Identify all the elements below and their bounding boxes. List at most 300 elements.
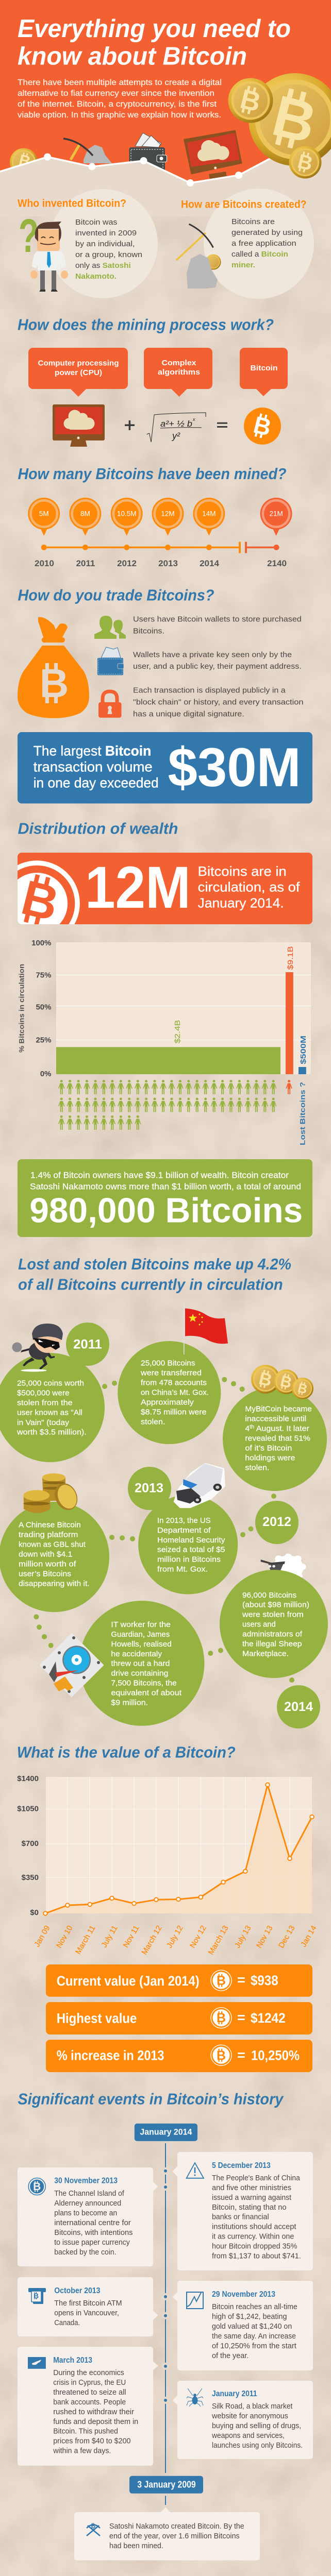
bubble: Mt. Gox 25,000: stolen.	[141, 1418, 165, 1427]
bubble: All in Vain 2011: 25,000 coins worth	[17, 1379, 84, 1387]
callout: 30M transaction: in one day exceeded	[34, 775, 159, 791]
card: 5 December 2013: it as currency. Within one	[212, 2232, 294, 2241]
card: Satoshi creates Bitcoin: Satoshi Nakamoto created Bitcoin. By the	[109, 2522, 244, 2531]
text: who invented: or a group, known	[75, 250, 142, 259]
icon: users	[94, 616, 126, 639]
bubble: 2013 Homeland Security	[128, 1467, 238, 1594]
callout: 12M in circulation: Bitcoins are in	[198, 863, 287, 879]
bubble: MyBitCoin: inaccessible until	[245, 1415, 306, 1423]
pin: 2013	[152, 498, 184, 536]
label: 3 January 2009: 3 January 2009	[137, 2480, 196, 2490]
callout: 980,000 Bitcoins: Satoshi Nakamoto owns more than $1 billion worth, a total of around	[30, 1182, 301, 1192]
panel: distribution of wealth	[0, 819, 312, 1237]
heading: significant events: Significant events in Bitcoin’s history	[18, 2090, 284, 2108]
bubble: GBL: A Chinese Bitcoin	[19, 1521, 81, 1530]
card: 29 November 2013: the same day. An increase	[212, 2332, 296, 2341]
card: 29 November 2013: of the year.	[212, 2351, 249, 2360]
stat: percent increase: =	[237, 2047, 245, 2063]
text: block chain	[133, 686, 303, 718]
intro text	[18, 78, 222, 120]
panel: mining process	[18, 315, 288, 447]
icon: armoured truck	[174, 1463, 225, 1508]
callout: 980,000 Bitcoins: 980,000 Bitcoins	[29, 1191, 303, 1230]
card: 29 November 2013: of 10,250% from the start	[212, 2342, 297, 2350]
heading: lost and stolen: of all Bitcoins currently in circulation	[18, 1275, 283, 1293]
bubble: GBL: disappearing with it.	[19, 1579, 90, 1588]
stat: current value	[46, 1964, 312, 1997]
card: March 2013	[18, 2347, 158, 2466]
icon: three coins: B	[257, 1368, 274, 1391]
bar chart: wealth distribution: % Bitcoins in circulation	[18, 964, 25, 1053]
bubble: Sheep Marketplace: administrators of	[242, 1630, 303, 1638]
icon: coin stacks	[23, 1473, 81, 1513]
pin: 2140: 21M	[269, 510, 283, 517]
card: March 2013: threatened to seize all	[53, 2388, 126, 2397]
icon: orange Bitcoin	[244, 408, 281, 445]
line chart: Bitcoin price: Dec 13	[277, 1924, 296, 1950]
bubble: James Howells: Guardian, James	[111, 1630, 170, 1639]
heading: distribution: Distribution of wealth	[18, 819, 178, 837]
bubble: James Howells	[79, 1601, 204, 1726]
stat: percent increase: 10,250%	[251, 2048, 300, 2063]
line chart: Bitcoin price: July 12	[165, 1924, 185, 1950]
panel: who invented Bitcoin	[18, 189, 158, 298]
heading: lost and stolen: Lost and stolen Bitcoins make up 4.2%	[18, 1255, 291, 1273]
label: lost Bitcoins: Lost Bitcoins ?	[299, 1082, 307, 1145]
hill	[0, 126, 331, 216]
card: March 2013: prices from $40 to $200	[53, 2437, 131, 2446]
bubble: 2012: 2012	[262, 1515, 291, 1529]
line graph ridge	[0, 126, 331, 187]
card: 5 December 2013: Bitcoin, stating that no	[212, 2203, 287, 2212]
callout: 980,000 Bitcoins	[18, 1159, 312, 1237]
text: who invented: only as Satoshi	[75, 261, 131, 270]
text: how created: called a Bitcoin	[231, 250, 288, 259]
bubble: 2014: 2014	[284, 1700, 313, 1714]
bubble: Sheep Marketplace: were stolen from	[242, 1611, 304, 1619]
pin: 2014: 14M	[202, 510, 216, 517]
heading: how created: How are Bitcoins created?	[181, 198, 307, 210]
card: 30 November 2013: The Channel Island of	[54, 2189, 124, 2198]
text: keys	[133, 650, 302, 671]
card: Satoshi creates Bitcoin: B	[91, 2522, 96, 2530]
bubble: Mt. Gox 25,000: from 478 accounts	[141, 1379, 207, 1387]
line chart: Bitcoin price: July 13	[233, 1924, 253, 1950]
card: January 2011: launches using only Bitcoins.	[212, 2441, 303, 2450]
card: 5 December 2013: 5 December 2013	[212, 2161, 271, 2170]
card: 5 December 2013	[173, 2152, 313, 2270]
card: January 2011: buying and selling of drugs,	[212, 2421, 301, 2430]
line chart: Bitcoin price	[17, 1774, 318, 1956]
card: March 2013: March 2013	[53, 2356, 92, 2365]
bubble: Mt. Gox 25,000: were transferred	[140, 1369, 202, 1378]
heading: lost and stolen	[18, 1255, 291, 1293]
people icons: Bitcoin owners	[58, 1080, 276, 1130]
callout: algorithms	[144, 348, 212, 397]
bubble: MyBitCoin: revealed that 51%	[245, 1434, 310, 1443]
bar chart: wealth distribution: $9.1B	[286, 946, 295, 970]
bubble: All in Vain 2011: stolen from the	[17, 1398, 73, 1408]
bubble: GBL: down with $4.1	[19, 1550, 72, 1559]
bubble: MyBitCoin: August. It later	[254, 1424, 309, 1433]
callout: algorithms: algorithms	[158, 368, 200, 377]
card: 30 November 2013: B	[33, 2181, 41, 2193]
bubble: James Howells: 7,500 Bitcoins, the	[111, 1679, 177, 1688]
callout: 12M in circulation: circulation, as of	[198, 879, 300, 895]
callout: Bitcoin: Bitcoin	[251, 364, 277, 372]
year labels: 2012	[117, 558, 137, 568]
callout: 30M transaction	[18, 732, 312, 804]
stat: current value: =	[237, 1972, 245, 1988]
formula	[147, 413, 206, 442]
line chart: Bitcoin price: $700	[22, 1839, 39, 1848]
formula: x	[192, 417, 195, 422]
card: 30 November 2013: to issue paper currency	[54, 2238, 130, 2247]
line chart: Bitcoin price: Nov 10	[55, 1924, 74, 1950]
stat: current value: Current value (Jan 2014)	[57, 1973, 200, 1989]
panel: value of a Bitcoin	[17, 1743, 318, 2072]
icon: money bag	[18, 617, 89, 718]
text: keys: user, and a public key, their payment address.	[133, 662, 302, 671]
icon: thief	[12, 1324, 63, 1371]
card: October 2013: Canada.	[54, 2318, 80, 2327]
icon: coin behind hill: B	[17, 151, 32, 171]
text: who invented: by an individual,	[75, 240, 135, 248]
bubble: All in Vain 2011: worth $3.5 million).	[16, 1428, 87, 1437]
bubble: James Howells: IT worker for the	[111, 1620, 171, 1629]
card: March 2013: within a few days.	[53, 2447, 111, 2455]
card: March 2013: crisis in Cyprus, the EU	[53, 2378, 126, 2387]
card: 30 November 2013: plans to become an	[54, 2209, 117, 2217]
bar chart: wealth distribution: 100%	[31, 939, 52, 947]
text: block chain: "block chain" or history, and every transaction	[133, 698, 303, 706]
bubble: 2013 Homeland Security: In 2013, the US	[157, 1516, 211, 1525]
bubble: GBL: million worth of	[19, 1560, 76, 1568]
icon: large coins: B	[295, 150, 315, 175]
line chart: Bitcoin price: March 13	[206, 1924, 230, 1956]
year labels: 2011	[76, 558, 95, 568]
text: how created: Bitcoins are	[231, 217, 275, 226]
timeline axis	[41, 542, 279, 553]
text: who invented	[75, 218, 142, 281]
icon: large coins: B	[267, 83, 322, 156]
card: October 2013: October 2013	[54, 2286, 101, 2295]
card: 5 December 2013: institutions should accept	[212, 2223, 296, 2231]
bubble: 2012	[255, 1501, 299, 1544]
callout: 980,000 Bitcoins: 1.4% of Bitcoin owners have $9.1 billion of wealth. Bitcoin creator	[30, 1171, 289, 1180]
card: March 2013: bank accounts. People	[53, 2398, 126, 2406]
card: Satoshi creates Bitcoin	[74, 2507, 260, 2561]
line chart: Bitcoin price: Jan 09	[32, 1924, 52, 1948]
card: October 2013: The first Bitcoin ATM	[54, 2299, 122, 2308]
callout: 12M in circulation: 12M	[85, 855, 191, 921]
card: 29 November 2013: high of $1,242, beating	[212, 2312, 287, 2321]
year labels: 2140	[267, 558, 287, 568]
bubble: 2013 Homeland Security: 2013	[135, 1481, 163, 1496]
bubble: Sheep Marketplace: (about $98 million)	[242, 1601, 309, 1609]
pin: 2013: 12M	[161, 510, 175, 517]
bubble: All in Vain 2011: 2011	[73, 1337, 102, 1351]
timeline line	[162, 2143, 169, 2505]
line chart: Bitcoin price: $1400	[17, 1774, 39, 1783]
bubble: James Howells: he accidentaly	[111, 1650, 162, 1658]
bubble: GBL: user’s Bitcoins	[19, 1569, 71, 1578]
title	[18, 15, 291, 71]
card: March 2013: funds and deposit them in	[53, 2417, 138, 2426]
card: January 2011: January 2011	[212, 2389, 257, 2398]
stat: percent increase	[46, 2040, 312, 2072]
formula: y²	[171, 431, 180, 441]
card: 30 November 2013	[18, 2167, 158, 2266]
text: block chain: has a unique digital signature.	[133, 709, 244, 718]
heading: how many mined: How many Bitcoins have been mined?	[18, 465, 287, 483]
bubble: All in Vain 2011: in Vain" (today	[17, 1418, 70, 1427]
card: 5 December 2013: hour Bitcoin dropped 35%	[212, 2242, 297, 2251]
stat: current value: B	[217, 1974, 226, 1988]
callout: 30M transaction: transaction volume	[34, 759, 153, 774]
heading: who invented: Who invented Bitcoin?	[18, 198, 126, 210]
stat: highest value	[46, 2002, 312, 2035]
panel: how are Bitcoins created	[176, 189, 314, 299]
bubble: James Howells: equivalent of about	[111, 1689, 182, 1697]
bubble: 2014	[277, 1685, 320, 1728]
text: wallets: Bitcoins.	[133, 626, 164, 635]
card: 30 November 2013: 30 November 2013	[54, 2177, 118, 2185]
bar chart: wealth distribution: $500M	[299, 1036, 308, 1064]
bar chart: wealth distribution	[18, 939, 311, 1078]
icon: monitor with cloud	[184, 130, 242, 179]
line chart: Bitcoin price: March 11	[74, 1924, 97, 1956]
stat: highest value: B	[217, 2011, 226, 2025]
year labels: 2014	[200, 558, 219, 568]
heading: value: What is the value of a Bitcoin?	[17, 1743, 236, 1761]
card: October 2013: B	[34, 2292, 39, 2300]
bubble: MyBitCoin: MyBitCoin became	[245, 1404, 312, 1414]
icon: money bag: B	[40, 660, 69, 706]
bubble: GBL: known as GBL shut	[19, 1540, 86, 1549]
stat: percent increase: % increase in 2013	[57, 2048, 164, 2063]
bubble: Mt. Gox 25,000: Approximately	[141, 1398, 194, 1406]
card: 5 December 2013: from $1,137 to about $741.	[212, 2251, 301, 2261]
stat: percent increase: B	[217, 2048, 226, 2063]
icon: China flag	[184, 1303, 228, 1354]
panel: header	[0, 0, 331, 216]
callout: CPU: power (CPU)	[55, 368, 102, 377]
bubble: MyBitCoin: holdings were	[245, 1454, 295, 1462]
line chart: Bitcoin price: Nov 13	[255, 1924, 274, 1950]
bubble: GBL: trading platform	[19, 1531, 78, 1539]
icon: large coins	[228, 73, 331, 178]
card: 29 November 2013: gold valued at $1,240 on	[212, 2322, 292, 2331]
bar chart: wealth distribution: 0%	[40, 1070, 52, 1078]
text: who invented: Bitcoin was	[75, 218, 118, 227]
plus sign	[125, 420, 135, 430]
card: Satoshi creates Bitcoin: end of the year, over 1.6 million Bitcoins	[109, 2532, 240, 2540]
line chart: Bitcoin price: March 12	[140, 1924, 163, 1956]
connector dots	[34, 1377, 294, 1683]
callout: algorithms: Complex	[162, 359, 196, 367]
bubble: Sheep Marketplace: the illegal Sheep	[242, 1639, 302, 1649]
text: wallets: Users have Bitcoin wallets to store purchased	[133, 615, 302, 623]
card: January 2011	[173, 2381, 313, 2459]
card: October 2013	[18, 2277, 158, 2336]
panel: how many mined	[18, 465, 292, 568]
intro text: of the internet. Bitcoin, a cryptocurrency, is the first	[18, 100, 217, 109]
bubble: GBL	[0, 1502, 109, 1612]
bubble: Sheep Marketplace: Marketplace.	[242, 1649, 289, 1658]
card: 5 December 2013: The People's Bank of China	[212, 2174, 300, 2182]
card: 30 November 2013: Alderney announced	[54, 2199, 121, 2208]
icon: three coins: B	[278, 1372, 293, 1392]
bubble: All in Vain 2011: $500,000 were	[17, 1389, 70, 1398]
card: 30 November 2013: Bitcoins, with intentions	[54, 2228, 133, 2237]
card: March 2013: rushed to withdraw their	[53, 2408, 134, 2416]
icon: hard drive	[39, 1633, 104, 1697]
title: know about Bitcoin	[18, 43, 247, 71]
bar chart: wealth distribution: 50%	[36, 1003, 52, 1012]
bubble: Sheep Marketplace	[220, 1570, 328, 1678]
pin: 2011	[69, 498, 101, 536]
callout: CPU	[28, 348, 128, 397]
label: January 2014: January 2014	[140, 2127, 192, 2137]
card: March 2013: During the economics	[53, 2368, 124, 2377]
card: October 2013: opens in Vancouver,	[54, 2309, 119, 2317]
bubble: Mt. Gox 25,000	[118, 1341, 221, 1444]
heading: mining process: How does the mining process work?	[18, 315, 274, 334]
callout: Bitcoin	[240, 348, 288, 396]
pin: 2014	[193, 498, 225, 536]
bubble: Mt. Gox 25,000: $8.75 million were	[141, 1408, 206, 1416]
intro text: alternative to fiat currency ever since the invention	[18, 89, 214, 98]
year labels	[35, 558, 287, 568]
bubble: 2013 Homeland Security: from Mt. Gox.	[157, 1565, 208, 1574]
line chart: Bitcoin price: Jan 14	[299, 1924, 318, 1948]
callout: 30M transaction: $30M	[168, 736, 301, 798]
card: 30 November 2013: backed by the coin.	[54, 2248, 117, 2257]
icon: wallet	[129, 133, 167, 176]
bubble: James Howells: drive containing	[111, 1669, 168, 1678]
bubble: 2013 Homeland Security: Department of	[157, 1526, 211, 1535]
icon: pickaxe and rock	[63, 139, 112, 163]
icon: man with question mark	[19, 210, 68, 292]
callout: CPU: Computer processing	[38, 359, 119, 368]
bubble: 2013 Homeland Security: million in Bitcoins	[157, 1555, 221, 1564]
pin: 2012	[111, 498, 143, 536]
bubble: Mt. Gox 25,000: 25,000 Bitcoins	[141, 1359, 195, 1368]
heading: trade: How do you trade Bitcoins?	[18, 586, 214, 604]
year labels: 2010	[35, 558, 54, 568]
icon: pickaxe, coin and rock	[176, 224, 221, 289]
formula: a²+ ½ b	[160, 419, 192, 429]
callout: 12M in circulation	[18, 853, 312, 924]
person: single large holder	[286, 1080, 292, 1094]
icon: three coins: B	[296, 1381, 309, 1397]
card: January 2011: Silk Road, a black market	[212, 2402, 293, 2411]
text: how created: miner.	[231, 261, 255, 269]
stat: current value: $938	[251, 1973, 278, 1988]
bar chart: wealth distribution: 75%	[36, 971, 52, 979]
icon: blue wallet	[97, 647, 124, 675]
text: keys: Wallets have a private key seen only by the	[133, 650, 292, 659]
callout: 12M in circulation: B	[16, 870, 64, 931]
bubble: 2013 Homeland Security: seized a total of $5	[157, 1546, 225, 1554]
text: who invented: Nakamoto.	[75, 272, 117, 281]
panel: how do you trade	[18, 586, 303, 718]
line chart: Bitcoin price: Nov 12	[188, 1924, 208, 1950]
card: 30 November 2013: international centre for	[54, 2218, 131, 2227]
card: March 2013: Bitcoin. This pushed	[53, 2427, 118, 2436]
year labels: 2013	[158, 558, 178, 568]
text: block chain: Each transaction is displayed publicly in a	[133, 686, 286, 694]
line chart: Bitcoin price: $1050	[17, 1805, 39, 1814]
icon: coin behind hill	[10, 148, 38, 176]
card: January 2011: website for anonymous	[211, 2412, 288, 2420]
card: 5 December 2013: banks or financial	[212, 2213, 269, 2222]
callout: 12M in circulation: January 2014.	[198, 895, 284, 911]
text: how created: generated by using	[231, 228, 303, 237]
line chart: Bitcoin price: $0	[30, 1908, 39, 1917]
card: January 2011: weapons and services,	[211, 2431, 285, 2440]
pin: 2011: 8M	[80, 510, 90, 517]
line chart: Bitcoin price: $350	[22, 1873, 39, 1882]
card: 5 December 2013: and five other ministries	[212, 2183, 291, 2192]
bubble: Sheep Marketplace: 96,000 Bitcoins	[242, 1591, 296, 1600]
card: Satoshi creates Bitcoin: had been mined.	[109, 2541, 163, 2550]
pin: 2010: 5M	[39, 510, 49, 517]
bubble: MyBitCoin: of it’s Bitcoin	[245, 1444, 292, 1453]
bar chart: wealth distribution: 25%	[36, 1036, 52, 1045]
equals sign	[217, 423, 227, 427]
panel: significant events timeline	[18, 2090, 313, 2561]
bubble: MyBitCoin	[223, 1387, 327, 1491]
text: how created: a free application	[231, 239, 296, 248]
bar chart: wealth distribution: $2.4B	[173, 1020, 182, 1043]
text: wallets	[133, 615, 302, 635]
bubble: MyBitCoin: th	[250, 1424, 254, 1430]
icon: orange Bitcoin: B	[251, 411, 274, 441]
intro text: There have been multiple attempts to create a digital	[18, 78, 222, 87]
card: 29 November 2013: 29 November 2013	[212, 2290, 275, 2299]
icon: man with question mark: ?	[19, 210, 39, 262]
bubble: All in Vain 2011: user known as "All	[17, 1409, 82, 1417]
stat: highest value: =	[237, 2010, 245, 2025]
bubble: 2013 Homeland Security: Homeland Security	[157, 1536, 225, 1545]
intro text: viable option. In this graphic we explain how it works.	[18, 111, 221, 120]
bubble: James Howells: $9 million.	[111, 1698, 148, 1707]
card: 5 December 2013: issued a warning against	[212, 2193, 292, 2202]
line chart: Bitcoin price: July 11	[100, 1924, 119, 1949]
stat: highest value: Highest value	[57, 2010, 137, 2026]
icon: monitor	[53, 404, 105, 447]
stat: highest value: $1242	[251, 2010, 286, 2026]
icon: sheep	[261, 1554, 306, 1585]
pin: 2010	[28, 498, 60, 536]
callout: 30M transaction: The largest Bitcoin	[34, 743, 151, 758]
bubble: Sheep Marketplace: users and	[242, 1620, 276, 1629]
title: Everything you need to	[18, 15, 291, 43]
icon: padlock	[98, 691, 122, 718]
icon: three coins	[251, 1365, 313, 1399]
card: 29 November 2013	[173, 2281, 313, 2370]
bubble: James Howells: threw out a hard	[111, 1659, 170, 1668]
text: who invented: invented in 2009	[75, 229, 137, 238]
label: 3 January 2009	[129, 2476, 203, 2494]
bubble: James Howells: Howells, realised	[111, 1640, 172, 1649]
pin: 2140	[260, 498, 292, 536]
line chart: Bitcoin price: Nov 11	[122, 1924, 141, 1949]
bubble: Mt. Gox 25,000: on China’s Mt. Gox.	[141, 1388, 209, 1397]
bubble: MyBitCoin: stolen.	[245, 1463, 269, 1472]
